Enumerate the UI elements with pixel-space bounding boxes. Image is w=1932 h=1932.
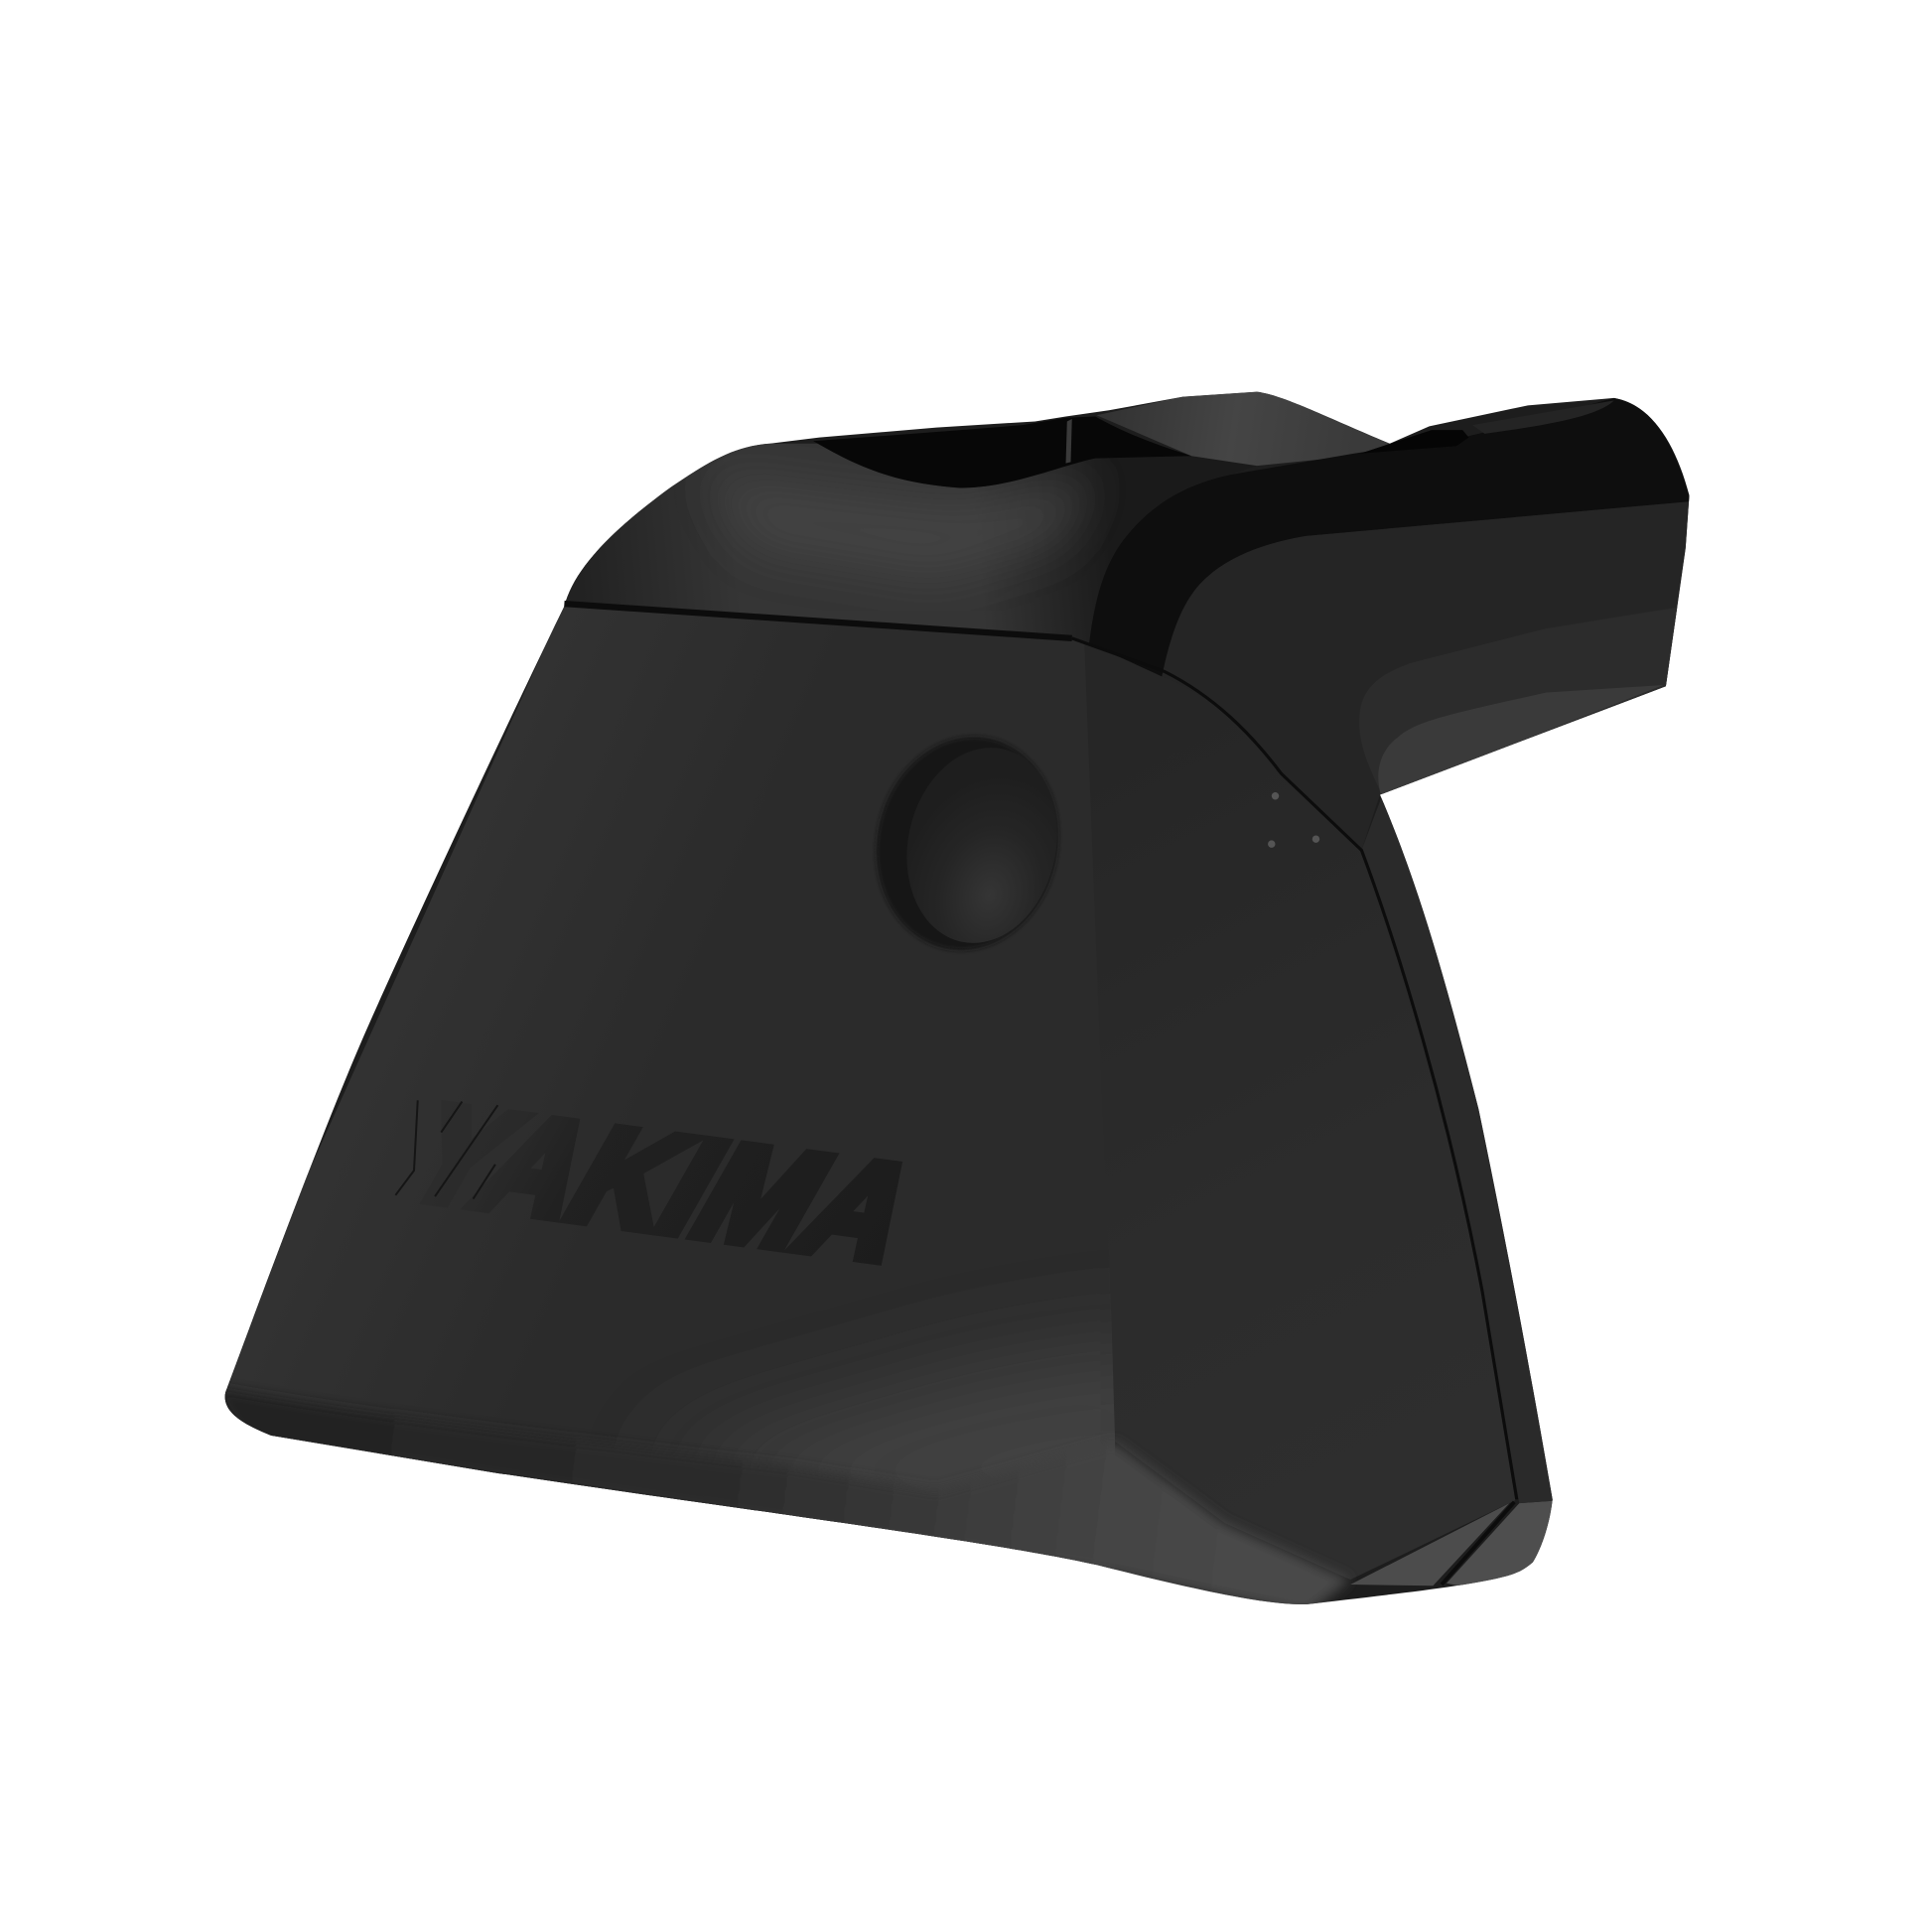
arm slot bbox=[1360, 430, 1468, 454]
logo Y edge lines bbox=[395, 1100, 497, 1199]
black arm stripe bbox=[1089, 398, 1691, 676]
corner facet side bbox=[1447, 1501, 1555, 1589]
arm side panel bbox=[1164, 501, 1690, 794]
cap highlights bbox=[739, 474, 1087, 572]
saddle top bbox=[1097, 392, 1390, 466]
arm top sheen bbox=[1472, 400, 1614, 434]
arm lighter band bbox=[1382, 608, 1678, 794]
product illustration: Yakima roof rack tower bbox=[224, 391, 1690, 1604]
small alignment dots bbox=[1268, 792, 1319, 848]
brand logo bbox=[378, 1078, 947, 1288]
brand logo text: YAKIMA bbox=[378, 1078, 947, 1288]
arm highlight band bbox=[1378, 685, 1663, 796]
right body panel bbox=[1084, 640, 1517, 1580]
upper cap bbox=[566, 443, 1063, 634]
front body panel bbox=[209, 604, 1115, 1589]
tower shading and facets bbox=[209, 392, 1691, 1614]
corner facet front bbox=[1350, 1503, 1509, 1586]
saddle opening bbox=[813, 416, 1191, 487]
saddle inner sliver bbox=[1066, 419, 1072, 464]
left panel lower glow bbox=[719, 1332, 1115, 1565]
mounting knob bbox=[857, 720, 1077, 967]
seam lines bbox=[564, 604, 1517, 1585]
right side strip bbox=[1361, 794, 1555, 1503]
bottom band bbox=[209, 1386, 1350, 1614]
tower silhouette bbox=[225, 392, 1690, 1604]
